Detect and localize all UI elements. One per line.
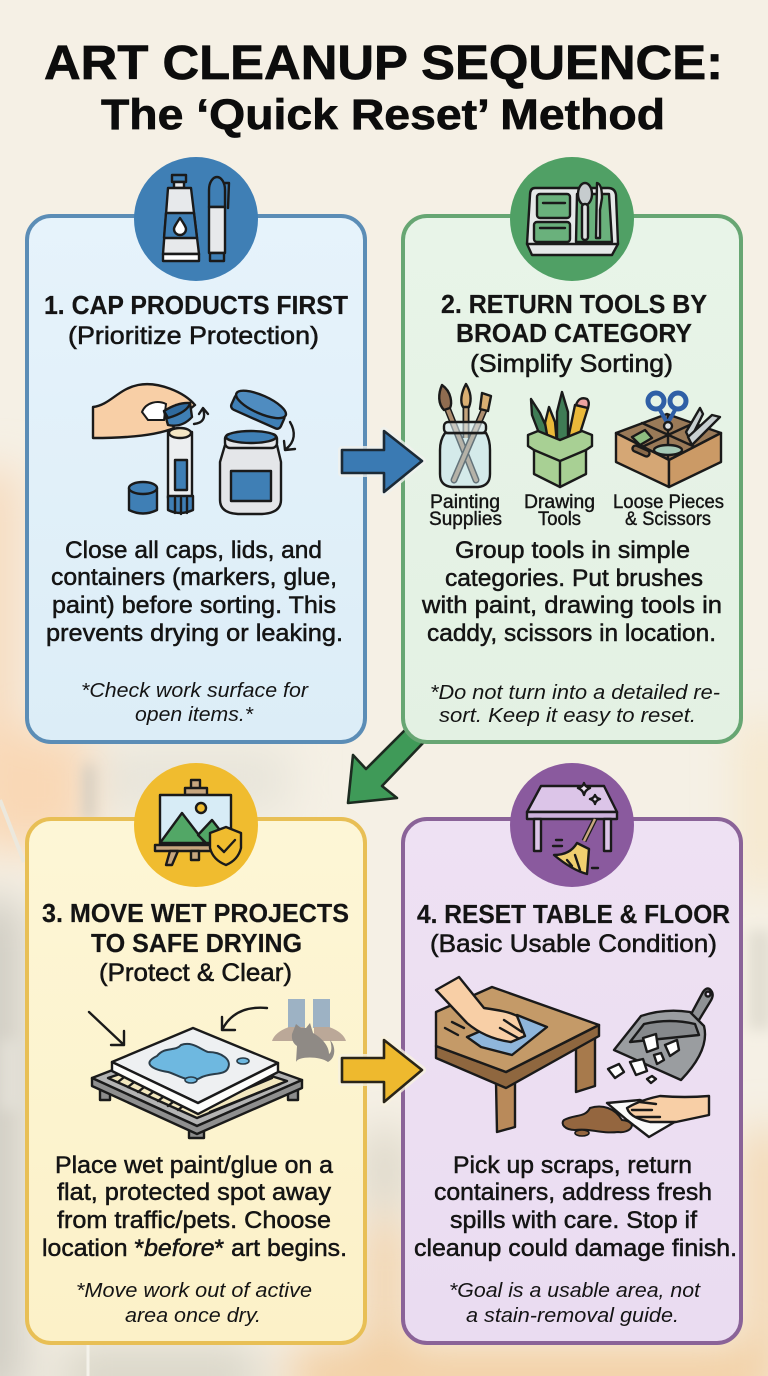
heading: 3. MOVE WET PROJECTS xyxy=(42,900,349,928)
heading: (Simplify Sorting) xyxy=(470,350,673,378)
illustration: dustpan with scraps xyxy=(608,988,713,1083)
body text: Group tools in simple xyxy=(455,537,690,564)
body text: flat, protected spot away xyxy=(57,1179,331,1206)
title: The ‘Quick Reset’ Method xyxy=(101,91,665,139)
heading xyxy=(441,291,707,378)
body text: location *before* art begins. xyxy=(42,1235,347,1262)
note xyxy=(430,681,720,727)
heading: 1. CAP PRODUCTS FIRST xyxy=(44,292,348,320)
heading xyxy=(417,901,730,958)
category labels: Drawing xyxy=(524,491,595,513)
illustration: drying rack with wet canvas xyxy=(89,1008,302,1138)
body text: from traffic/pets. Choose xyxy=(57,1207,331,1234)
heading: TO SAFE DRYING xyxy=(91,930,302,958)
body text: categories. Put brushes xyxy=(445,565,703,592)
heading: 2. RETURN TOOLS BY xyxy=(441,291,707,319)
body text: Place wet paint/glue on a xyxy=(55,1152,334,1179)
note: area once dry. xyxy=(125,1304,261,1327)
arrow: step 3 to step 4 xyxy=(342,1040,422,1102)
category labels: Supplies xyxy=(429,508,502,530)
heading: (Prioritize Protection) xyxy=(68,322,319,350)
illustration: feet and cat in traffic xyxy=(272,999,346,1062)
body text: with paint, drawing tools in xyxy=(421,592,722,619)
title: ART CLEANUP SEQUENCE: xyxy=(44,37,723,90)
category labels xyxy=(429,491,724,530)
illustration: wiping table xyxy=(436,977,599,1132)
body text: containers (markers, glue, xyxy=(51,564,337,591)
heading: (Basic Usable Condition) xyxy=(430,930,717,958)
note xyxy=(449,1279,701,1327)
heading xyxy=(42,900,349,987)
icon badge: paint tube and marker xyxy=(134,157,258,281)
illustration: drawing tools cup xyxy=(528,392,592,487)
body text: spills with care. Stop if xyxy=(450,1207,697,1234)
category labels: Loose Pieces xyxy=(613,491,724,513)
panel: step 4 reset table and floor xyxy=(403,763,741,1343)
panel: step 2 return tools xyxy=(403,157,741,742)
body text: paint) before sorting. This xyxy=(52,592,336,619)
note: a stain-removal guide. xyxy=(466,1304,679,1327)
body text: caddy, scissors in location. xyxy=(427,620,716,647)
body text xyxy=(421,537,722,647)
heading xyxy=(44,292,348,350)
panel: step 1 cap products xyxy=(27,157,365,742)
illustration: painting supplies jar xyxy=(439,384,491,487)
illustration: wiping spill xyxy=(563,1096,709,1137)
body text xyxy=(414,1152,737,1262)
note: sort. Keep it easy to reset. xyxy=(439,704,696,727)
category labels: Tools xyxy=(538,508,581,530)
icon badge: table and broom xyxy=(510,763,634,887)
note: *Move work out of active xyxy=(76,1279,312,1302)
body text: Pick up scraps, return xyxy=(453,1152,692,1179)
title xyxy=(44,37,723,139)
note xyxy=(76,1279,312,1327)
note: *Do not turn into a detailed re- xyxy=(430,681,720,704)
arrow: step 1 to step 2 xyxy=(342,431,422,492)
body text xyxy=(42,1152,347,1262)
body text: Close all caps, lids, and xyxy=(65,537,322,564)
body text xyxy=(46,537,343,647)
heading: (Protect & Clear) xyxy=(99,959,292,987)
body text: prevents drying or leaking. xyxy=(46,620,343,647)
note: *Goal is a usable area, not xyxy=(449,1279,701,1302)
arrow: step 2 to step 3 xyxy=(348,730,423,803)
heading: BROAD CATEGORY xyxy=(456,320,692,348)
note: *Check work surface for xyxy=(81,679,309,702)
illustration: capping glue stick and jar xyxy=(93,384,295,514)
note: open items.* xyxy=(135,703,254,726)
heading: 4. RESET TABLE & FLOOR xyxy=(417,901,730,929)
icon badge: easel and shield xyxy=(134,763,258,887)
note xyxy=(81,679,309,726)
body text: cleanup could damage finish. xyxy=(414,1235,737,1262)
icon badge: sorting tray xyxy=(510,157,634,281)
body text: containers, address fresh xyxy=(434,1179,712,1206)
category labels: & Scissors xyxy=(625,508,711,530)
panel: step 3 move wet projects xyxy=(27,763,365,1343)
category labels: Painting xyxy=(430,491,500,513)
illustration: loose pieces box and scissors xyxy=(616,393,721,487)
